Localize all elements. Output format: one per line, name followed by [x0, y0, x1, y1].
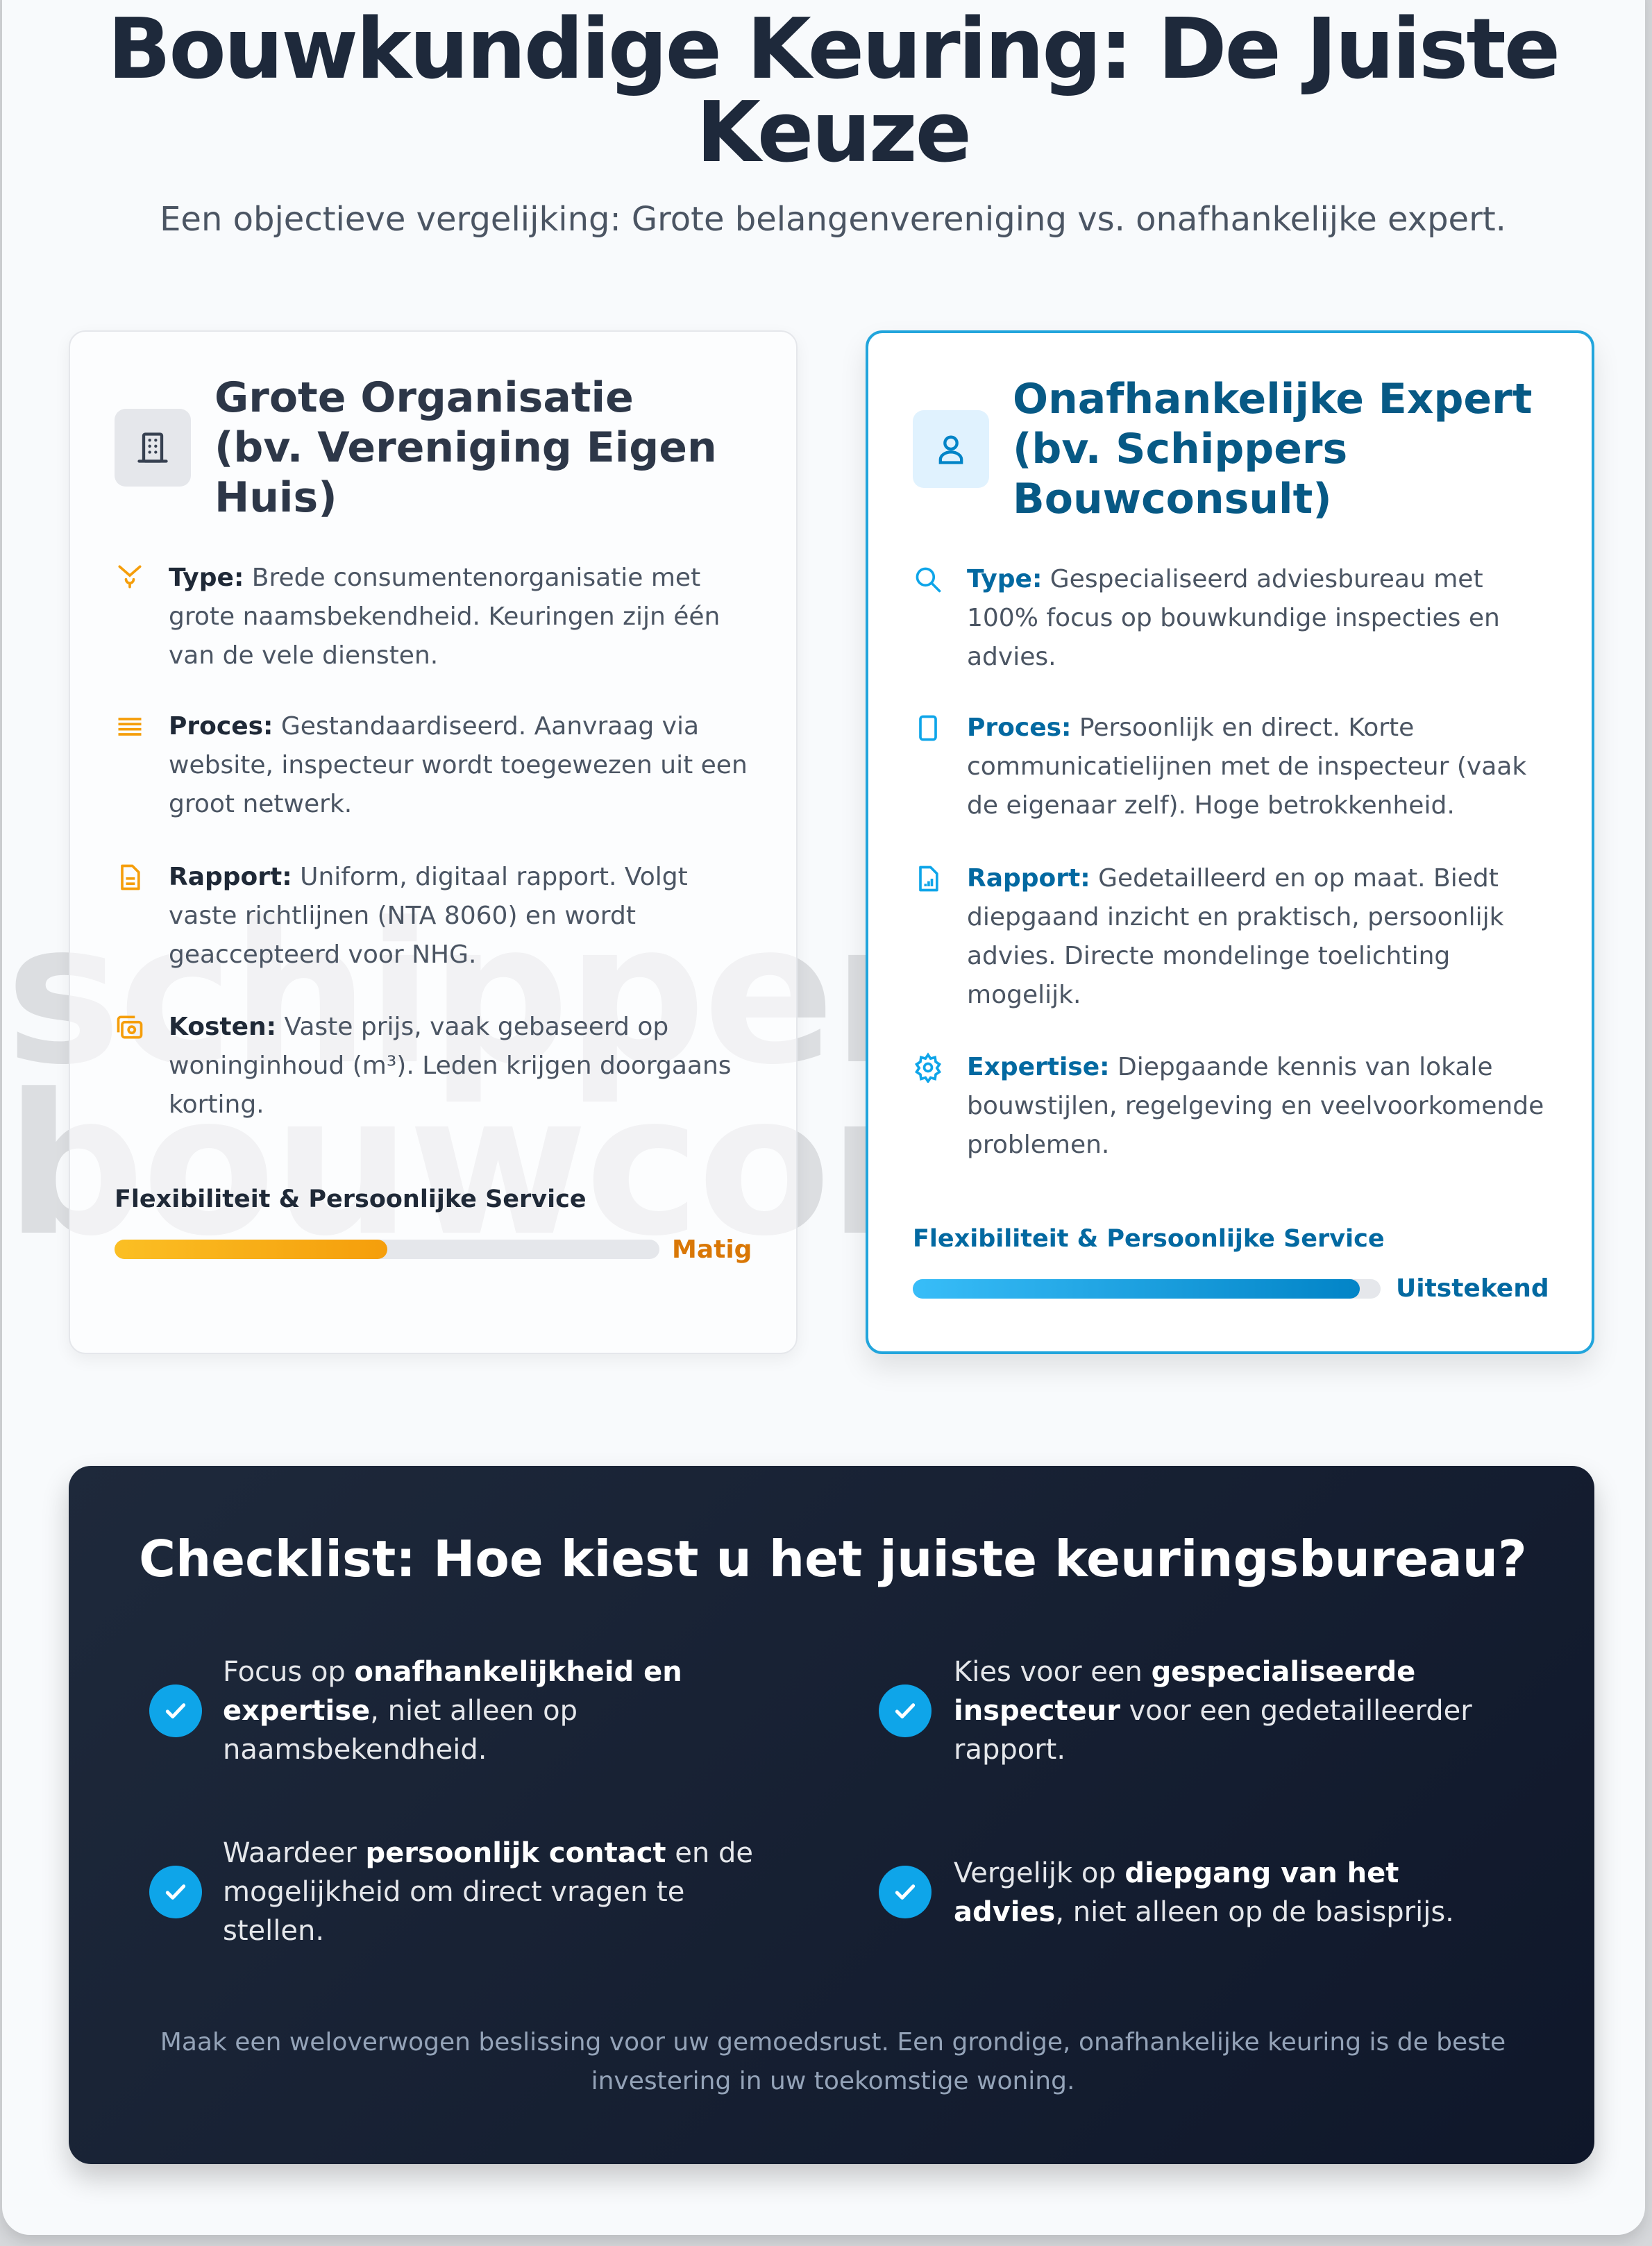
- icon: list: [118, 718, 142, 736]
- item: expertise: Expertise: Diepgaande kennis van lokale bouwstijlen, regelgeving en veelvoorkomende problemen.: [967, 1053, 1544, 1159]
- checklist title: Checklist: Hoe kiest u het juiste keuringsbureau?: [139, 1530, 1527, 1588]
- icon: money: [117, 1016, 143, 1038]
- card title left: Grote Organisatie: [214, 373, 634, 422]
- checklist item 1: Focus op onafhankelijkheid en expertise, niet alleen op naamsbekendheid.: [223, 1656, 682, 1766]
- watermark: schipper: [6, 881, 925, 1108]
- bar: uitstekend: [913, 1279, 1381, 1299]
- item: proces: Proces: Persoonlijk en direct. Korte communicatielijnen met de inspecteur (vaak de eigenaar zelf). Hoge betrokkenheid.: [967, 714, 1526, 820]
- bar: matig: [115, 1240, 659, 1259]
- card title left: [214, 373, 717, 522]
- icon: check: [879, 1684, 932, 1737]
- checklist item 3: Waardeer persoonlijk contact en de mogelijkheid om direct vragen te stellen.: [223, 1837, 753, 1947]
- icon: type: [118, 565, 142, 589]
- item: rapport: Rapport: Gedetailleerd en op maat. Biedt diepgaand inzicht en praktisch, persoonlijk advies. Directe mondelinge toelichting mogelijk.: [967, 864, 1503, 1009]
- card title right: Bouwconsult): [1013, 475, 1332, 523]
- title: Keuze: [696, 85, 970, 181]
- panel: onafhankelijke expert: [866, 330, 1594, 1354]
- card title right: Onafhankelijke Expert: [1013, 375, 1532, 423]
- item: proces: Proces: Gestandaardiseerd. Aanvraag via website, inspecteur wordt toegewezen uit een groot netwerk.: [169, 712, 748, 818]
- icon: building: [115, 409, 191, 487]
- rating label left: Flexibiliteit & Persoonlijke Service: [115, 1185, 587, 1213]
- icon: chart document: [919, 866, 938, 891]
- item: type: Type: Gespecialiseerd adviesbureau met 100% focus op bouwkundige inspecties en advies.: [967, 565, 1500, 671]
- watermark: bouwcon: [6, 1053, 963, 1279]
- rating value left: Matig: [672, 1235, 752, 1264]
- card title right: [1013, 375, 1532, 523]
- subtitle: Een objectieve vergelijking: Grote belangenvereniging vs. onafhankelijke expert.: [160, 200, 1506, 239]
- icon: search: [916, 568, 941, 593]
- icon: person: [913, 410, 989, 488]
- card header right: [913, 375, 1532, 523]
- card title left: Huis): [214, 473, 337, 522]
- card title left: (bv. Vereniging Eigen: [214, 423, 717, 472]
- card header left: [115, 373, 717, 522]
- icon: check: [149, 1684, 202, 1737]
- item: type: Type: Brede consumentenorganisatie met grote naamsbekendheid. Keuringen zijn één van de vele diensten.: [169, 564, 720, 670]
- icon: check: [149, 1866, 202, 1918]
- card title right: (bv. Schippers: [1013, 425, 1347, 473]
- panel: checklist: [69, 1466, 1594, 2164]
- panel: grote organisatie: [69, 330, 798, 1354]
- icon: gear: [915, 1052, 941, 1083]
- title: Bouwkundige Keuring: De Juiste: [108, 1, 1558, 98]
- item: rapport: Rapport: Uniform, digitaal rapport. Volgt vaste richtlijnen (NTA 8060) en wordt geaccepteerd voor NHG.: [169, 863, 688, 969]
- icon: document: [121, 865, 140, 890]
- footer note: Maak een weloverwogen beslissing voor uw gemoedsrust. Een grondige, onafhankelijke keuring is de beste investering in uw toekomstige woning.: [160, 2028, 1506, 2095]
- title: [108, 1, 1558, 181]
- rating value right: Uitstekend: [1396, 1274, 1549, 1303]
- icon: phone: [919, 715, 937, 741]
- rating label right: Flexibiliteit & Persoonlijke Service: [913, 1225, 1385, 1253]
- checklist item 4: Vergelijk op diepgang van het advies, niet alleen op de basisprijs.: [954, 1857, 1454, 1928]
- watermark: [6, 881, 963, 1279]
- checklist item 2: Kies voor een gespecialiseerde inspecteur voor een gedetailleerder rapport.: [954, 1656, 1472, 1766]
- icon: check: [879, 1866, 932, 1918]
- item: kosten: Kosten: Vaste prijs, vaak gebaseerd op woninginhoud (m³). Leden krijgen doorgaans korting.: [169, 1013, 732, 1119]
